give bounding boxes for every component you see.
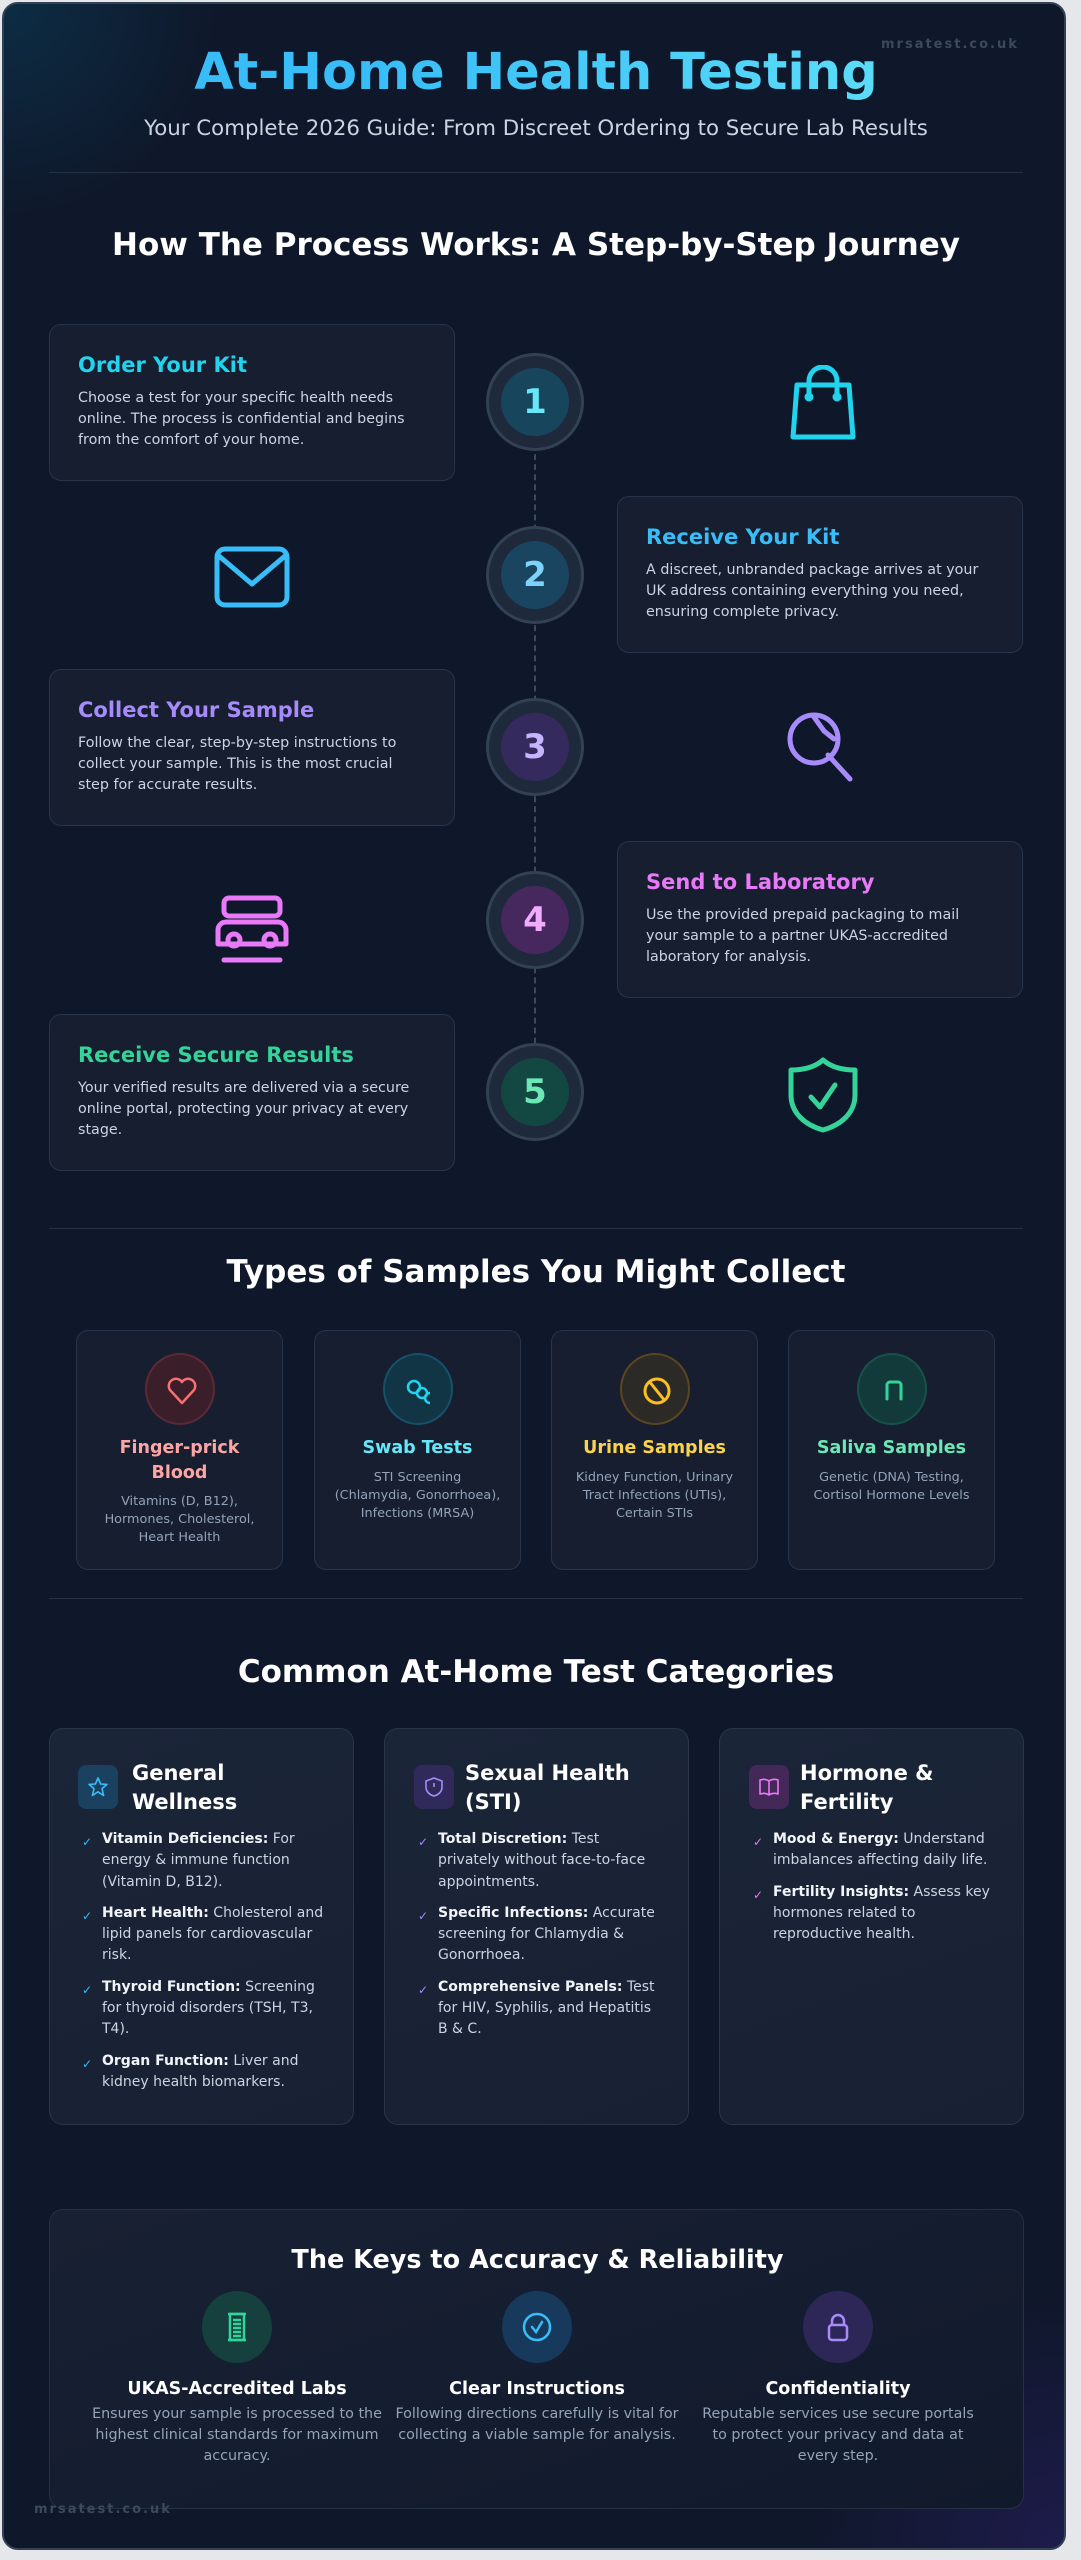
timeline line: [534, 444, 536, 1094]
key: confidentiality: Reputable services use secure portals to protect your privacy and data at every step.: [702, 2406, 974, 2464]
sample card: urine: [551, 1330, 758, 1570]
title: At-Home Health Testing: [194, 43, 878, 102]
category: general wellness: Thyroid Function: Screening for thyroid disorders (TSH, T3, T4).: [102, 1979, 315, 2037]
step 5 number: [486, 1043, 584, 1141]
step 2 number: 2: [523, 555, 547, 595]
step 5 card: Your verified results are delivered via a secure online portal, protecting your privacy at every stage.: [78, 1080, 409, 1138]
icon: shopping bag: [790, 365, 856, 440]
sample card: saliva: [788, 1330, 995, 1570]
icon: shield check: [788, 1057, 858, 1132]
step 2 card: Receive Your Kit: [646, 525, 839, 549]
category: sexual health: [384, 1728, 689, 2125]
heading: process: How The Process Works: A Step-by-Step Journey: [112, 227, 960, 263]
category: sexual health: (STI): [465, 1790, 521, 1814]
category: general wellness: ✓: [82, 1983, 92, 1997]
category: hormone & fertility: Fertility Insights: Assess key hormones related to reproductive health.: [773, 1884, 990, 1942]
sample card: urine: Urine Samples: [583, 1438, 726, 1458]
step 4 card: Use the provided prepaid packaging to mail your sample to a partner UKAS-accredited laboratory for analysis.: [646, 907, 959, 965]
watermark top: mrsatest.co.uk: [881, 37, 1019, 52]
category: hormone & fertility: ✓: [753, 1888, 763, 1902]
step 4 card: [617, 841, 1023, 998]
heading: sample types: Types of Samples You Might Collect: [226, 1254, 845, 1290]
sample card: saliva: Saliva Samples: [817, 1438, 966, 1458]
step 3 card: Follow the clear, step-by-step instructions to collect your sample. This is the most crucial step for accurate results.: [78, 735, 396, 793]
category: general wellness: [49, 1728, 354, 2125]
sample card: swab: STI Screening: [374, 1470, 461, 1485]
category: hormone & fertility: ✓: [753, 1835, 763, 1849]
key: UKAS labs: [92, 2291, 382, 2464]
category: general wellness: ✓: [82, 1835, 92, 1849]
step 5 number: 5: [523, 1072, 547, 1112]
category: sexual health: Comprehensive Panels: Test for HIV, Syphilis, and Hepatitis B & C.: [438, 1979, 655, 2037]
category: general wellness: ✓: [82, 1909, 92, 1923]
category: general wellness: Heart Health: Cholesterol and lipid panels for cardiovascular risk.: [102, 1905, 323, 1963]
watermark bottom: mrsatest.co.uk: [34, 2502, 172, 2517]
sample card: saliva: Genetic (DNA) Testing, Cortisol Hormone Levels: [814, 1470, 970, 1503]
panel: keys to accuracy: [49, 2209, 1024, 2509]
step 1 number: [486, 353, 584, 451]
sample card: urine: Kidney Function, Urinary Tract Infections (UTIs), Certain STIs: [576, 1470, 733, 1521]
category: sexual health: Specific Infections: Accurate screening for Chlamydia & Gonorrhoea.: [438, 1905, 655, 1963]
sample card: finger-prick blood: [76, 1330, 283, 1570]
step 3 card: [49, 669, 455, 826]
step 3 number: [486, 698, 584, 796]
category: hormone & fertility: Fertility: [800, 1790, 893, 1814]
sample card: finger-prick blood: Finger-prick: [120, 1438, 239, 1458]
key: UKAS labs: UKAS-Accredited Labs: [127, 2379, 347, 2399]
sample card: swab: [314, 1330, 521, 1570]
step 3 card: Collect Your Sample: [78, 698, 314, 722]
step 5 card: Receive Secure Results: [78, 1043, 354, 1067]
step 4 number: [486, 871, 584, 969]
category: general wellness: Organ Function: Liver and kidney health biomarkers.: [102, 2053, 298, 2090]
category: hormone & fertility: Hormone &: [800, 1761, 934, 1785]
category: general wellness: General: [132, 1761, 224, 1785]
key: UKAS labs: Ensures your sample is processed to the highest clinical standards for maximum accuracy.: [92, 2406, 382, 2464]
key: confidentiality: Confidentiality: [765, 2379, 911, 2399]
title: [4, 42, 1068, 104]
subtitle: Your Complete 2026 Guide: From Discreet Ordering to Secure Lab Results: [144, 116, 928, 141]
sample card: finger-prick blood: Vitamins (D, B12), Hormones, Cholesterol, Heart Health: [105, 1494, 254, 1545]
key: clear instructions: Clear Instructions: [449, 2379, 625, 2399]
sample card: finger-prick blood: Blood: [152, 1463, 207, 1483]
step 4 card: Send to Laboratory: [646, 870, 874, 894]
icon: envelope: [214, 546, 290, 608]
step 5 card: [49, 1014, 455, 1171]
sample card: swab: (Chlamydia, Gonorrhoea),: [335, 1488, 500, 1503]
category: general wellness: Wellness: [132, 1790, 237, 1814]
category: hormone & fertility: [719, 1728, 1024, 2125]
key: confidentiality: [702, 2291, 974, 2464]
heading: keys: The Keys to Accuracy & Reliability: [291, 2245, 784, 2275]
category: sexual health: Total Discretion: Test privately without face-to-face appointments.: [438, 1831, 645, 1890]
step 2 number: [486, 526, 584, 624]
step 1 card: Order Your Kit: [78, 353, 247, 377]
key: clear instructions: Following directions carefully is vital for collecting a viable sample for analysis.: [395, 2406, 679, 2443]
heading: categories: Common At-Home Test Categories: [238, 1654, 834, 1690]
sample card: swab: Infections (MRSA): [361, 1506, 474, 1521]
step 1 card: [49, 324, 455, 481]
category: general wellness: Vitamin Deficiencies: For energy & immune function (Vitamin D, B12).: [102, 1831, 295, 1890]
step 4 number: 4: [523, 900, 547, 940]
category: general wellness: ✓: [82, 2057, 92, 2071]
step 1 number: 1: [523, 382, 547, 422]
icon: magnifier: [788, 712, 852, 782]
step 2 card: A discreet, unbranded package arrives at your UK address containing everything you need, ensuring complete privacy.: [646, 562, 978, 620]
key: clear instructions: [395, 2291, 679, 2443]
category: sexual health: ✓: [418, 1909, 428, 1923]
step 2 card: [617, 496, 1023, 653]
sample card: swab: Swab Tests: [363, 1438, 472, 1458]
category: sexual health: ✓: [418, 1983, 428, 1997]
icon: van: [216, 896, 288, 962]
category: sexual health: Sexual Health: [465, 1761, 630, 1785]
step 3 number: 3: [523, 727, 547, 767]
step 1 card: Choose a test for your specific health needs online. The process is confidential and begins from the comfort of your home.: [78, 390, 405, 448]
category: hormone & fertility: Mood & Energy: Understand imbalances affecting daily life.: [773, 1831, 987, 1868]
category: sexual health: ✓: [418, 1835, 428, 1849]
